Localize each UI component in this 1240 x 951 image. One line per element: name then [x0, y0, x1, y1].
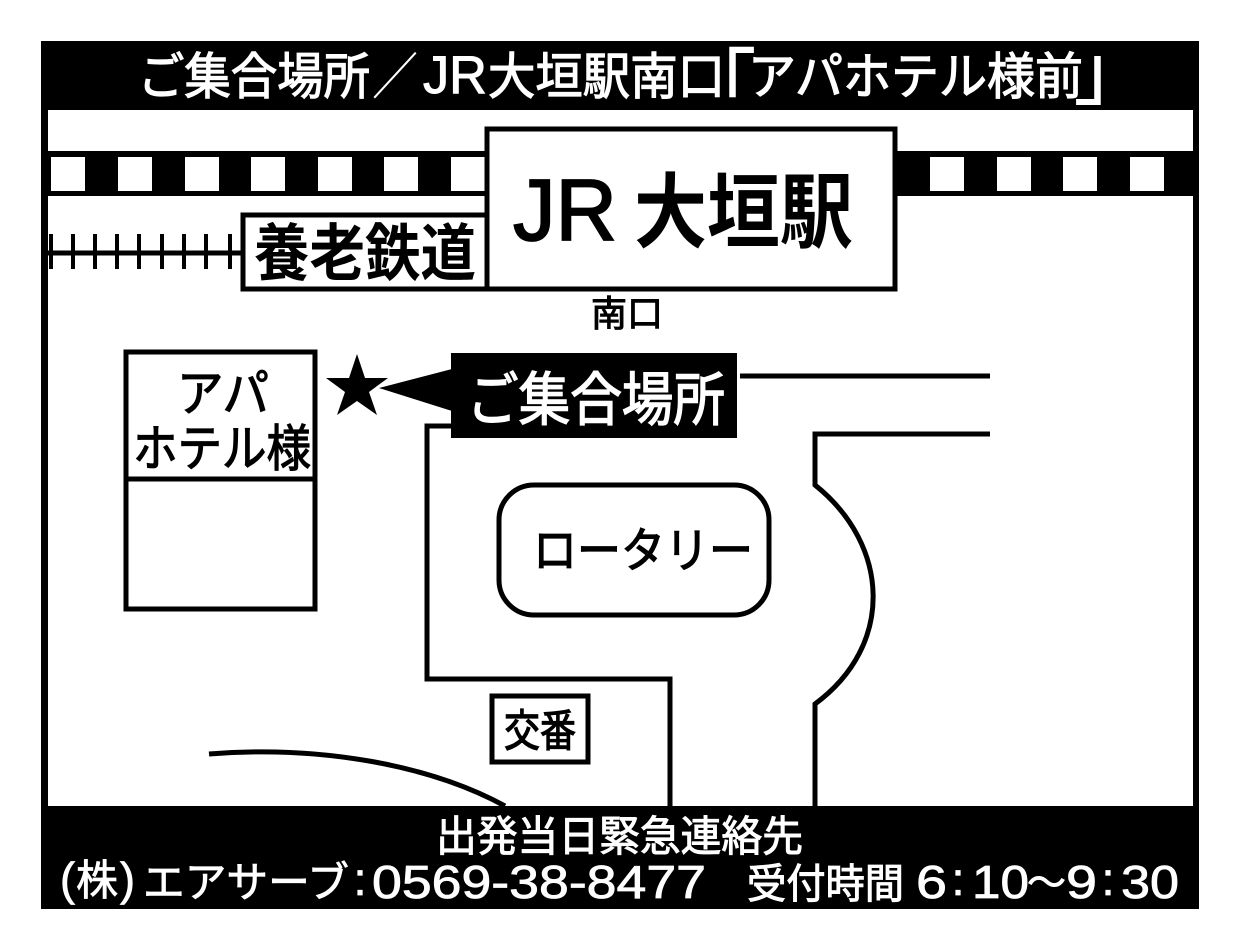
- APA hotel building: アパ: [177, 366, 269, 422]
- title bar: アパホテル様前: [748, 49, 1083, 105]
- reception hours: :: [952, 853, 964, 905]
- police box: 交番: [504, 707, 576, 756]
- reception hours: 10: [972, 856, 1029, 908]
- title bar: JR: [423, 46, 487, 105]
- title bar: ／: [372, 49, 418, 105]
- reception hours: 受付時間: [747, 861, 904, 907]
- title bar: ご集合場所: [138, 49, 370, 105]
- company and phone: (: [60, 853, 76, 905]
- title bar: [41, 31, 1199, 128]
- meeting point callout: [379, 353, 737, 438]
- rotary: ロータリー: [533, 525, 753, 578]
- company and phone: 0569-38-8477: [372, 856, 706, 908]
- company and phone: :: [354, 853, 366, 905]
- reception hours: [747, 853, 1179, 908]
- company and phone: エアサーブ: [143, 859, 349, 906]
- title bar: 「: [681, 44, 756, 128]
- police box: [492, 696, 588, 762]
- reception hours: 6: [916, 856, 947, 908]
- road lines: [209, 376, 990, 806]
- emergency contact bar: [41, 806, 1199, 909]
- APA hotel building: ホテル様: [133, 421, 311, 477]
- emergency heading: 出発当日緊急連絡先: [436, 813, 803, 860]
- reception hours: 30: [1121, 856, 1179, 908]
- rotary: [499, 485, 769, 615]
- Yoro railway label: 養老鉄道: [254, 220, 476, 289]
- star: meeting point: [326, 354, 388, 415]
- company and phone: 株: [76, 857, 118, 904]
- meeting point callout: ご集合場所: [467, 368, 725, 433]
- south exit label: 南口: [591, 293, 663, 334]
- reception hours: 9: [1066, 856, 1097, 908]
- title bar: 大垣駅南口: [488, 49, 725, 105]
- Yoro railway track: [48, 234, 242, 269]
- reception hours: ～: [1027, 863, 1066, 905]
- APA hotel building: [126, 352, 315, 609]
- reception hours: :: [1102, 853, 1114, 905]
- Ogaki station box: JR: [513, 162, 617, 259]
- company and phone: [60, 853, 706, 908]
- Ogaki station box: 大垣駅: [634, 168, 853, 259]
- railway band: [45, 151, 1195, 196]
- title bar: 」: [1074, 31, 1149, 114]
- company and phone: ): [120, 853, 135, 905]
- Ogaki station box: [487, 129, 895, 289]
